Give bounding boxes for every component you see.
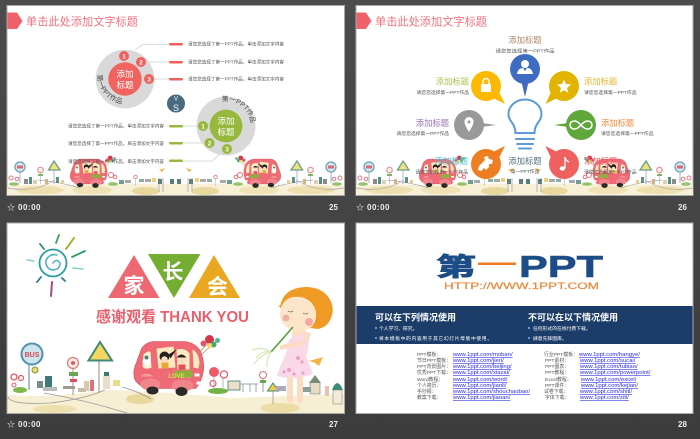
usage: not allowed: 任何形式的在线付费下载。 [533, 325, 591, 332]
callout: music note [546, 146, 579, 179]
text: middle right label: 添加标题 [601, 118, 634, 128]
red circle group: 1 [122, 53, 126, 60]
text: middle left label [396, 118, 449, 137]
red circle group: 3 [147, 76, 151, 83]
red list rows: 请您您选择了第一PPT作品，单击添加文字内容 [188, 76, 284, 82]
text: top label: 请您您选择第一PPT作品 [496, 48, 555, 54]
footer: slide 26 timing: ☆ [356, 203, 364, 212]
text: middle left label: 添加标题 [416, 118, 449, 128]
VS badge [167, 94, 185, 113]
right village [208, 367, 343, 404]
bus LOVE lettering: LOVE [168, 374, 185, 380]
footer: slide 26 timing: 26 [678, 203, 687, 212]
footer: slide 28 number: 28 [678, 420, 687, 429]
text: lower right label [584, 156, 637, 176]
footer: slide 26 timing: 00:00 [367, 203, 390, 212]
logo: 第 [436, 254, 476, 282]
triangle: 长 [148, 254, 200, 298]
text: upper right label: 添加标题 [584, 76, 617, 86]
panel: slide 28 brand and links [356, 223, 693, 414]
text: upper left label: 添加标题 [436, 76, 469, 86]
links: left column: 手抄报： [417, 388, 437, 395]
text: lower right label: 添加标题 [584, 156, 617, 166]
logo: HTTP://WWW.1PPT.COM [444, 281, 599, 292]
icon: light bulb [508, 100, 542, 148]
red circle group [96, 50, 154, 108]
callout: star [546, 71, 579, 104]
footer: slide 27 timing [7, 420, 338, 429]
panel: slide 27 thank you [7, 223, 344, 414]
text: middle right label [601, 118, 654, 137]
links: left column: www.1ppt.com/moban/ [452, 352, 513, 358]
usage: not allowed: 不可以在以下情况使用 [528, 312, 618, 322]
ground scene left [356, 156, 525, 195]
callout: lock [471, 71, 505, 104]
text: lower left label: 请您您选择第一PPT作品 [415, 168, 468, 176]
red list rows: 请您您选择了第一PPT作品，单击添加文字内容 [188, 40, 284, 48]
green circle group: 2 [208, 140, 212, 147]
links: right column: www.1ppt.com/hangye/ [578, 352, 640, 358]
links: right column: www.1ppt.com/sucai/ [579, 358, 636, 364]
footer: slide 27 timing: 27 [329, 420, 338, 429]
triangle: 家: 家 [124, 274, 144, 298]
green circle group [196, 95, 256, 156]
callout: location pin [454, 110, 496, 140]
links: right column: PPT课件： [545, 382, 569, 389]
footer: slide 25 timing: ☆ [7, 203, 15, 212]
links: left column [417, 351, 530, 401]
callout: puzzle [471, 146, 505, 179]
triangle: 家 [108, 255, 160, 298]
text: upper right label [584, 76, 637, 96]
links: right column: www.1ppt.com/excel/ [580, 377, 637, 383]
links: right column: www.1ppt.com/tubiao/ [579, 364, 638, 370]
links: left column: PPT背景图片： [417, 363, 451, 370]
slide title [356, 12, 487, 29]
links: right column: 试卷下载： [544, 388, 568, 395]
links: left column: www.1ppt.com/xiazai/ [452, 370, 510, 376]
ground scene right [175, 156, 344, 195]
logo: PPT [519, 249, 603, 284]
usage: allowed [375, 312, 492, 342]
text: center label: 第一PPT作品 [511, 168, 539, 175]
green circle group: 1 [201, 123, 205, 130]
green circle group: 标题 [217, 127, 235, 137]
green list rows: 请您您选择了第一PPT作品，单击添加文字内容 [68, 122, 164, 130]
links: right column: 字体下载： [545, 394, 569, 401]
text: lower right label: 请您您选择第一PPT作品 [584, 168, 637, 176]
ground scene right [524, 156, 693, 195]
triangle: 会 [189, 255, 240, 299]
red circle group: 添加 [116, 69, 134, 79]
illustration: bus with children [134, 335, 220, 396]
text: center label [508, 156, 542, 175]
links: left column: www.1ppt.com/jiaoan/ [452, 395, 511, 401]
slide title [8, 12, 138, 29]
green list rows: 请您您选择了第一PPT作品，单击添加文字内容 [68, 158, 164, 165]
illustration: girl with flower [252, 287, 333, 403]
VS badge: S [173, 103, 179, 113]
links: right column: www.1ppt.com/ziti/ [579, 395, 629, 401]
text: upper left label: 请您您选择第一PPT作品 [416, 89, 469, 96]
callout: infinity link [554, 110, 596, 140]
green circle group: 3 [225, 146, 229, 153]
links: left column: www.1ppt.com/jianli/ [452, 383, 507, 389]
triangle: 会: 会 [207, 276, 228, 299]
links: left column: 节日PPT模板： [417, 357, 451, 364]
text: top label: 添加标题 [508, 35, 542, 45]
ground and roads [8, 387, 344, 413]
sign: bus stop: BUS [25, 352, 40, 359]
links: left column: www.1ppt.com/beijing/ [452, 364, 512, 370]
icon: paper plane [309, 357, 323, 366]
links: right column: 行业PPT模板： [544, 351, 578, 358]
ground scene left [7, 156, 176, 195]
red list rows: 请您您选择了第一PPT作品，单击添加文字内容 [188, 58, 284, 66]
footer: slide 25 timing [7, 203, 338, 212]
usage: allowed: 将本模板中的内容用于其它幻灯片母版中使用。 [379, 335, 492, 342]
links: left column: www.1ppt.com/word/ [452, 377, 508, 383]
footer: slide 27 timing: 00:00 [18, 420, 41, 429]
connector lines [135, 44, 220, 161]
slide title: 单击此处添加文字标题 [375, 14, 487, 28]
sign: bus stop [22, 344, 42, 390]
green circle group: 第一PPT作品 [222, 95, 256, 123]
links: right column: www.1ppt.com/kejian/ [580, 383, 638, 389]
green circle group: 添加 [217, 116, 235, 126]
usage band [356, 306, 692, 344]
links: left column: 个人简历： [417, 382, 441, 389]
red list rows [169, 40, 284, 82]
links: left column: 教案下载： [417, 394, 441, 401]
panel: slide 26 light bulb diagram [356, 6, 693, 196]
VS badge: V [174, 96, 178, 102]
logo [436, 249, 603, 292]
links: right column: PPT教程： [545, 369, 569, 376]
text: lower left label [415, 156, 468, 176]
icon: sun [27, 235, 85, 296]
text: middle left label: 请您您选择第一PPT作品 [396, 130, 449, 137]
links: left column: www.1ppt.com/shouchaobao/ [452, 389, 530, 395]
green list rows [68, 122, 183, 165]
usage: not allowed [528, 312, 618, 342]
links: left column: www.1ppt.com/jieri/ [452, 358, 504, 364]
heading: thank you: 感谢观看 THANK YOU [96, 307, 249, 326]
red circle group: 标题 [116, 80, 134, 90]
links: left column: 优秀PPT下载： [417, 369, 451, 376]
links: left column: Word教程： [417, 376, 443, 383]
callout: person [510, 54, 540, 97]
triangle: 长: 长 [162, 261, 184, 284]
red circle group: 2 [139, 59, 143, 66]
footer: slide 27 timing: ☆ [7, 420, 15, 429]
footer: slide 25 timing: 00:00 [18, 203, 41, 212]
text: center label: 添加标题 [508, 156, 542, 166]
slide title: 单击此处添加文字标题 [26, 14, 138, 28]
links: right column: PPT图表： [545, 363, 569, 370]
usage: allowed: 可以在下列情况使用 [375, 312, 456, 322]
footer: slide 26 timing [356, 203, 687, 212]
links: right column: PPT素材： [545, 357, 569, 364]
sign: triangle [88, 342, 112, 392]
text: middle right label: 请您您选择第一PPT作品 [601, 130, 654, 137]
links: right column: www.1ppt.com/powerpoint/ [579, 370, 651, 376]
panel: slide 25 radial comparison [6, 5, 345, 196]
green list rows: 请您您选择了第一PPT作品，单击添加文字内容 [68, 140, 164, 147]
left village [11, 367, 120, 393]
text: lower left label: 添加标题 [435, 156, 468, 166]
text: upper right label: 请您您选择第一PPT作品 [584, 89, 637, 96]
text: upper left label [416, 76, 469, 96]
links: right column: www.1ppt.com/shiti/ [579, 389, 632, 395]
usage: not allowed: 肆意先锋图库。 [533, 335, 567, 342]
red circle group: 第一PPT作品 [96, 74, 122, 104]
links: left column: PPT模板： [417, 351, 441, 358]
usage: allowed: 个人学习、研究。 [379, 325, 417, 332]
links: right column: Excel教程： [545, 376, 572, 383]
text: top label [496, 35, 555, 54]
footer: slide 25 timing: 25 [329, 203, 338, 212]
sign: heart and arrow [68, 358, 78, 395]
links: right column [544, 351, 651, 401]
